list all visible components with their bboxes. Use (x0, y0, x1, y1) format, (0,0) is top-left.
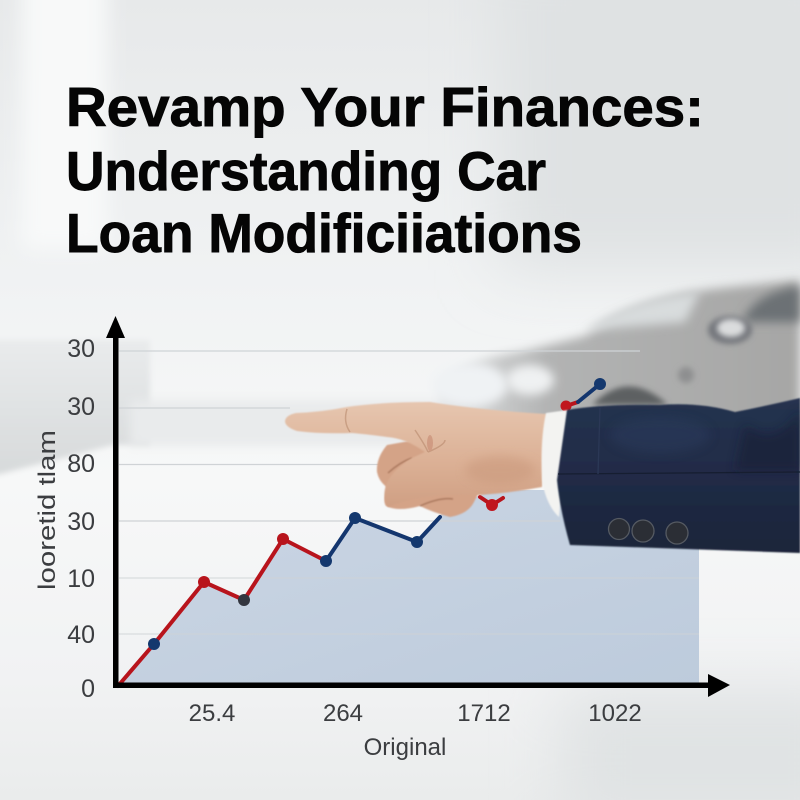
y axis labels (67, 335, 95, 703)
title: Revamp Your Finances: (66, 76, 704, 138)
sleeve fold shading (558, 472, 800, 474)
x axis with arrow (113, 674, 730, 697)
x axis title: Original (364, 734, 446, 761)
x axis labels: 1022 (588, 700, 642, 727)
y axis labels: 30 (67, 393, 95, 421)
title (66, 76, 704, 264)
shaded area under line (118, 490, 699, 686)
x axis labels: 1712 (457, 700, 511, 727)
line chart (34, 316, 730, 761)
sleeve buttons (608, 518, 688, 544)
suit sleeve (557, 398, 800, 553)
title: Loan Modificiiations (66, 202, 582, 264)
y axis labels: 80 (67, 450, 95, 478)
blurred car (432, 280, 800, 425)
data line (118, 384, 600, 686)
x axis labels (189, 700, 642, 727)
y axis labels: 30 (67, 508, 95, 536)
gridlines (119, 351, 699, 634)
y axis labels: 30 (67, 335, 95, 363)
y axis labels: 40 (67, 621, 95, 649)
pointing hand (285, 402, 547, 517)
y axis with arrow (106, 316, 125, 688)
x axis labels: 25.4 (189, 700, 235, 727)
hand and index finger (285, 402, 547, 507)
data points (148, 378, 606, 650)
shirt cuff (542, 410, 568, 517)
hand shadow patch (465, 456, 535, 484)
curled fingers (377, 430, 480, 517)
x axis labels: 264 (323, 700, 363, 727)
y axis title: looretid tlam (34, 430, 61, 590)
knuckle shading (346, 409, 445, 452)
y axis labels: 0 (81, 675, 95, 703)
title: Understanding Car (66, 140, 546, 202)
y axis labels: 10 (67, 565, 95, 593)
